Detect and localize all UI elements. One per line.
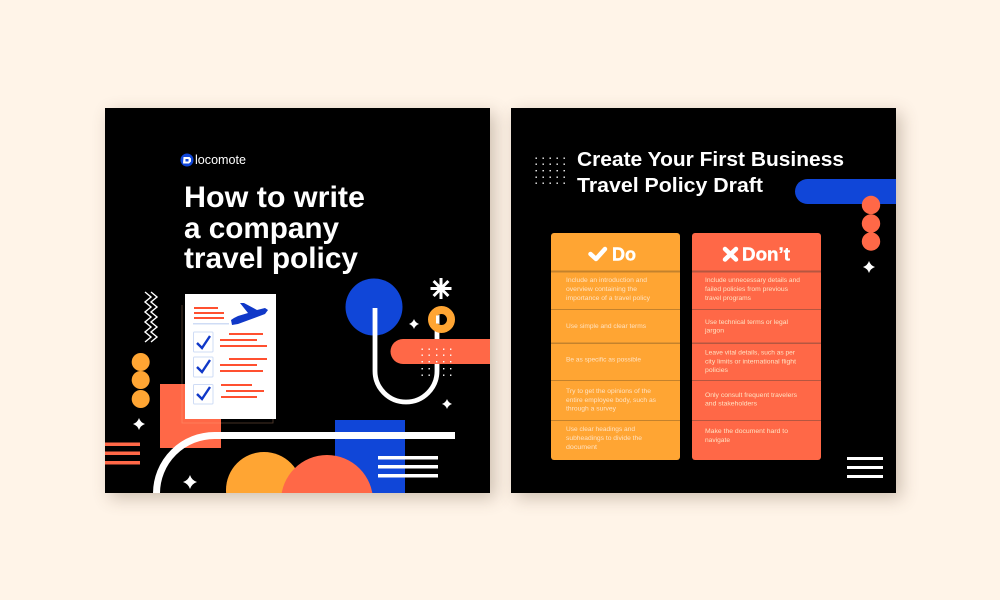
coral stripes — [105, 442, 140, 464]
icon: airplane — [231, 303, 268, 325]
white curved bar — [156, 435, 455, 493]
title — [577, 149, 844, 197]
do list text: Use clear headings and — [566, 426, 635, 433]
don't list text: travel programs — [705, 295, 752, 302]
icon: sparkle left — [133, 418, 145, 430]
don't list text: jargon — [704, 328, 724, 334]
white stripes — [378, 456, 438, 478]
title — [184, 181, 365, 275]
checklist boxes — [194, 332, 213, 404]
don't list text: Only consult frequent travelers — [705, 392, 798, 399]
orange circle stack — [132, 353, 150, 408]
don't list text: and stakeholders — [705, 400, 758, 408]
coral semicircle — [281, 455, 373, 547]
blue circle — [346, 278, 402, 336]
heading: don't: Don’t — [742, 244, 790, 264]
document outline shadow — [182, 305, 273, 423]
icon: cross — [725, 249, 736, 260]
do list text — [566, 277, 657, 451]
don't list text: failed policies from previous — [705, 286, 789, 293]
card: do — [551, 233, 680, 460]
don't list text: city limits or international flight — [705, 358, 796, 366]
do list text: entire employee body, such as — [566, 397, 657, 404]
icon: zigzag lines — [145, 292, 157, 342]
icon: check — [590, 249, 605, 259]
don't list text: navigate — [705, 437, 730, 444]
do list text: document — [566, 444, 597, 451]
dot grid — [536, 158, 565, 184]
title: How to write — [184, 181, 365, 214]
menu icon stripes — [847, 457, 883, 478]
checkmarks — [197, 336, 210, 399]
blue pill — [795, 179, 896, 204]
heading: do: Do — [612, 244, 636, 264]
panel: how to write a company travel policy — [105, 108, 490, 493]
orange ring — [432, 310, 451, 329]
title: Create Your First Business — [577, 149, 844, 171]
don't list text: policies — [705, 367, 729, 374]
do list text: overview containing the — [566, 286, 637, 293]
don't list text: Use technical terms or legal — [705, 319, 789, 326]
icon: sparkle — [863, 261, 875, 273]
policy document — [185, 294, 276, 419]
panel: create your first business travel policy draft — [511, 108, 896, 493]
coral circle stack — [862, 196, 880, 251]
do list text: through a survey — [566, 406, 617, 412]
do list text: Include an introduction and — [566, 277, 647, 284]
checklist text lines — [220, 333, 267, 398]
blue rectangle — [335, 420, 405, 493]
do list text: Be as specific as possible — [566, 356, 641, 364]
title: a company — [184, 212, 339, 245]
don't list text — [704, 277, 800, 444]
icon: asterisk — [430, 278, 452, 299]
don't list text: Leave vital details, such as per — [705, 350, 796, 356]
dot grid — [422, 348, 451, 376]
do list text: subheadings to divide the — [566, 435, 642, 442]
do list text: Use simple and clear terms — [566, 323, 647, 330]
do list text: importance of a travel policy — [566, 295, 651, 302]
icon: sparkle bottom — [183, 475, 197, 489]
title: travel policy — [184, 242, 358, 275]
white U-shaped line — [375, 308, 437, 402]
don't list text: Include unnecessary details and — [705, 277, 800, 284]
icon: sparkle lower — [442, 399, 452, 409]
row dividers — [692, 270, 821, 421]
logo: locomote: locomote — [195, 153, 246, 167]
row dividers — [551, 270, 680, 421]
card: don't — [692, 233, 821, 460]
title: Travel Policy Draft — [577, 175, 763, 197]
icon: sparkle upper — [409, 319, 419, 329]
do list text: Try to get the opinions of the — [566, 388, 651, 395]
coral pill — [390, 339, 490, 364]
don't list text: Make the document hard to — [705, 428, 788, 435]
coral square — [160, 384, 221, 448]
orange semicircle — [226, 452, 302, 528]
